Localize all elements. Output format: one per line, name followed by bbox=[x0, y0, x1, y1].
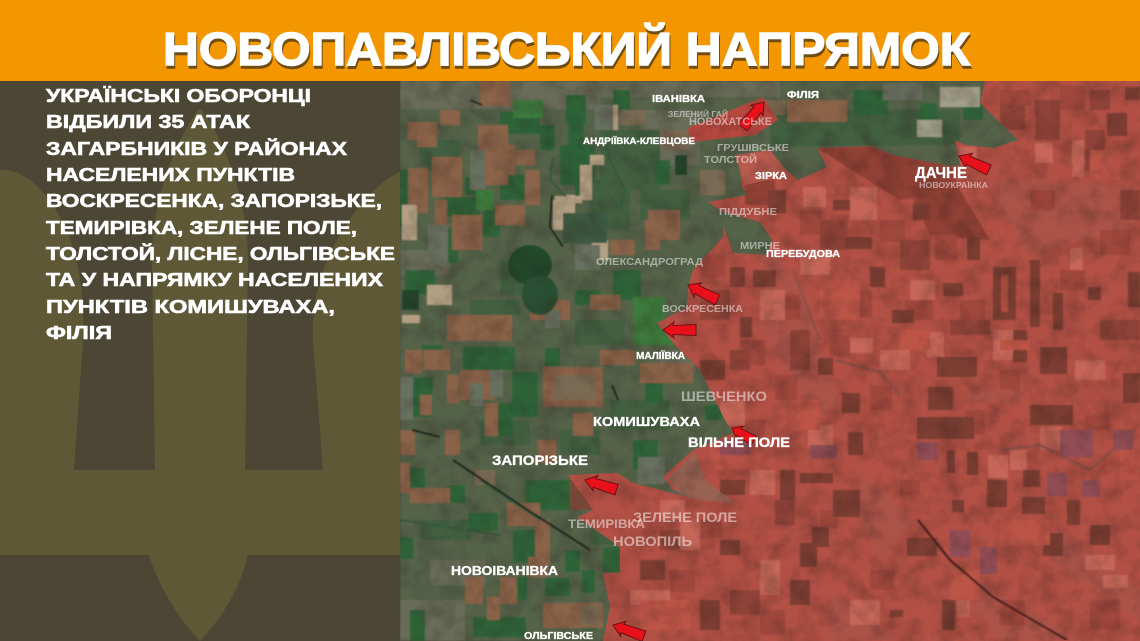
map area bbox=[400, 81, 1140, 641]
faded settlement labels: ТЕМИРІВКА bbox=[568, 517, 645, 531]
satellite fields: unoccupied territory bbox=[400, 81, 1018, 641]
mid-tone field grid bbox=[670, 85, 1130, 635]
white settlement labels: АНДРІЇВКА-КЛЕВЦОВЕ bbox=[583, 136, 695, 147]
left panel with trident emblem bbox=[0, 81, 400, 641]
faded settlement labels: ПІДДУБНЕ bbox=[719, 206, 777, 218]
body text: НАСЕЛЕНИХ ПУНКТІВ bbox=[46, 165, 295, 185]
faded settlement labels: МИРНЕ bbox=[740, 240, 780, 252]
forest bbox=[508, 245, 552, 285]
white settlement labels: ІВАНІВКА bbox=[652, 93, 705, 105]
white settlement labels bbox=[451, 90, 967, 641]
orange title banner bbox=[0, 0, 1140, 81]
title shadow: НОВОПАВЛІВСЬКИЙ НАПРЯМОК bbox=[164, 26, 972, 78]
white settlement labels: ЗАПОРІЗЬКЕ bbox=[492, 453, 588, 468]
body text: ЗАГАРБНИКІВ У РАЙОНАХ bbox=[46, 138, 347, 159]
body text: ФІЛІЯ bbox=[46, 323, 112, 343]
pale bare fields bbox=[402, 105, 618, 323]
faded settlement labels: НОВОХАТСЬКЕ bbox=[689, 116, 772, 128]
white settlement labels: КОМИШУВАХА bbox=[593, 415, 700, 429]
arrow: Vilne Pole bbox=[731, 426, 757, 445]
white settlement labels: ФІЛІЯ bbox=[787, 90, 819, 101]
rough terrain bands bbox=[760, 246, 1068, 640]
dark hills bbox=[745, 146, 990, 240]
darker fields bbox=[640, 87, 1140, 630]
brown ploughed fields bbox=[400, 81, 847, 628]
lighter fields bbox=[630, 140, 1128, 625]
faded settlement labels: ЗЕЛЕНЕ ПОЛЕ bbox=[633, 510, 737, 525]
arrow: Novokhatske bbox=[738, 102, 764, 132]
faded settlement labels: ШЕВЧЕНКО bbox=[681, 389, 767, 404]
title: НОВОПАВЛІВСЬКИЙ НАПРЯМОК bbox=[163, 23, 971, 75]
white settlement labels: ДАЧНЕ bbox=[915, 165, 967, 182]
white settlement labels: МАЛІЇВКА bbox=[636, 349, 685, 362]
body text: ВІДБИЛИ 35 АТАК bbox=[46, 112, 251, 132]
purple tinted fields bbox=[720, 430, 1133, 574]
body text: ТЕМИРІВКА, ЗЕЛЕНЕ ПОЛЕ, bbox=[46, 218, 357, 238]
faded settlement labels: НОВОУКРАЇНКА bbox=[919, 180, 988, 190]
trident emblem bbox=[0, 108, 400, 641]
red salient at Novokhatske bbox=[688, 97, 778, 142]
dark ravine bbox=[918, 520, 1067, 640]
faded settlement labels: ВОСКРЕСЕНКА bbox=[662, 303, 743, 315]
white settlement labels: НОВОІВАНІВКА bbox=[451, 564, 558, 578]
body text: ВОСКРЕСЕНКА, ЗАПОРІЗЬКЕ, bbox=[46, 191, 382, 211]
occupied territory red overlay bbox=[568, 81, 1140, 641]
body text: ПУНКТІВ КОМИШУВАХА, bbox=[46, 297, 335, 317]
arrow: Voskresenka south bbox=[663, 322, 696, 338]
arrow: Voskresenka north bbox=[687, 282, 720, 306]
arrow: Olhivske bbox=[612, 620, 646, 641]
faded settlement labels bbox=[568, 108, 988, 549]
white settlement labels: ПЕРЕБУДОВА bbox=[766, 248, 840, 260]
rivers bbox=[412, 100, 618, 550]
body text: ТОЛСТОЙ, ЛІСНЕ, ОЛЬГІВСЬКЕ bbox=[46, 243, 395, 264]
faded settlement labels: ГРУШІВСЬКЕ bbox=[717, 142, 789, 154]
faded settlement labels: ТОЛСТОЙ bbox=[704, 153, 757, 166]
faded settlement labels: ОЛЕКСАНДРОГРАД bbox=[596, 256, 704, 268]
bright and dark green crops bbox=[400, 90, 983, 641]
red patch at Tolstoy bbox=[735, 150, 790, 185]
grey strips bbox=[400, 83, 923, 484]
faded settlement labels: ЗЕЛЕНИЙ ГАЙ bbox=[668, 108, 728, 119]
faded settlement labels: НОВОПІЛЬ bbox=[613, 534, 692, 549]
body text bbox=[46, 86, 395, 343]
white settlement labels: ЗІРКА bbox=[755, 170, 787, 182]
arrow: Dachne bbox=[958, 152, 992, 176]
contested grey-green pocket bbox=[668, 452, 735, 503]
body text: УКРАЇНСЬКІ ОБОРОНЦІ bbox=[46, 86, 311, 106]
white settlement labels: ВІЛЬНЕ ПОЛЕ bbox=[688, 435, 790, 450]
body text: ТА У НАПРЯМКУ НАСЕЛЕНИХ bbox=[46, 270, 383, 290]
arrow: Zaporizke bbox=[584, 474, 619, 496]
